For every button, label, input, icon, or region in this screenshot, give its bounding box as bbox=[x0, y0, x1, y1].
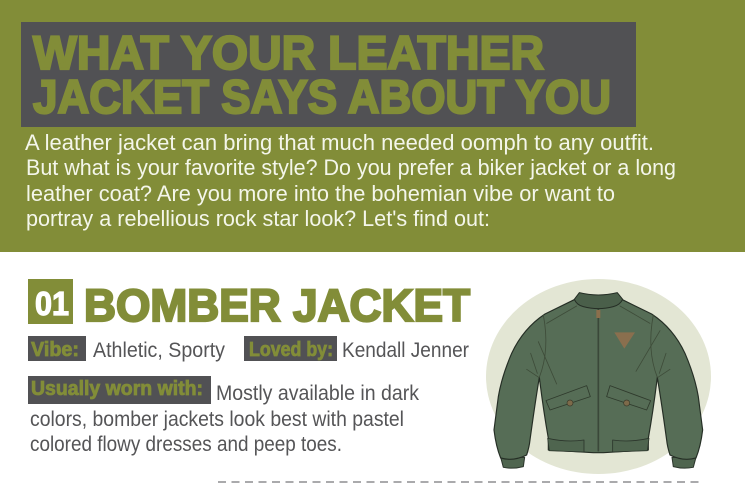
vibe label: Vibe: bbox=[31, 339, 79, 361]
intro text bbox=[25, 130, 676, 231]
title: JACKET SAYS ABOUT YOU bbox=[33, 70, 611, 123]
zipper bbox=[596, 309, 601, 452]
number badge 01 bbox=[28, 279, 73, 324]
dashed divider bbox=[218, 481, 700, 483]
title: WHAT YOUR LEATHER bbox=[33, 26, 544, 79]
jacket backdrop circle bbox=[486, 279, 711, 474]
collar bbox=[574, 293, 623, 309]
right hem rib bbox=[613, 438, 649, 452]
intro text: A leather jacket can bring that much needed oomph to any outfit. bbox=[25, 130, 654, 155]
vibe value: Athletic, Sporty bbox=[93, 339, 225, 362]
description text bbox=[30, 382, 419, 456]
left cuff bbox=[501, 457, 525, 468]
header band bbox=[0, 0, 745, 252]
right pocket bbox=[607, 386, 651, 410]
number badge 01: 01 bbox=[35, 285, 69, 322]
left pocket bbox=[546, 386, 590, 410]
description text: Mostly available in dark bbox=[216, 382, 419, 405]
right cuff bbox=[672, 457, 696, 468]
zipper pull bbox=[596, 310, 600, 318]
intro text: But what is your favorite style? Do you prefer a biker jacket or a long bbox=[26, 155, 676, 180]
usually worn with label: Usually worn with: bbox=[31, 378, 203, 400]
description text: colored flowy dresses and peep toes. bbox=[30, 433, 342, 456]
left hem rib bbox=[548, 438, 584, 452]
loved by value: Kendall Jenner bbox=[342, 339, 469, 362]
description text: colors, bomber jackets look best with pastel bbox=[30, 408, 404, 431]
chest patch bbox=[614, 332, 635, 349]
seams and folds bbox=[527, 306, 670, 384]
intro text: portray a rebellious rock star look? Let's find out: bbox=[26, 206, 490, 231]
loved by label: Loved by: bbox=[249, 339, 333, 361]
jacket body bbox=[494, 299, 703, 459]
intro text: leather coat? Are you more into the bohemian vibe or want to bbox=[26, 181, 615, 206]
section heading: BOMBER JACKET bbox=[84, 280, 470, 331]
icon: bomber jacket bbox=[494, 293, 703, 468]
title bbox=[21, 22, 636, 127]
